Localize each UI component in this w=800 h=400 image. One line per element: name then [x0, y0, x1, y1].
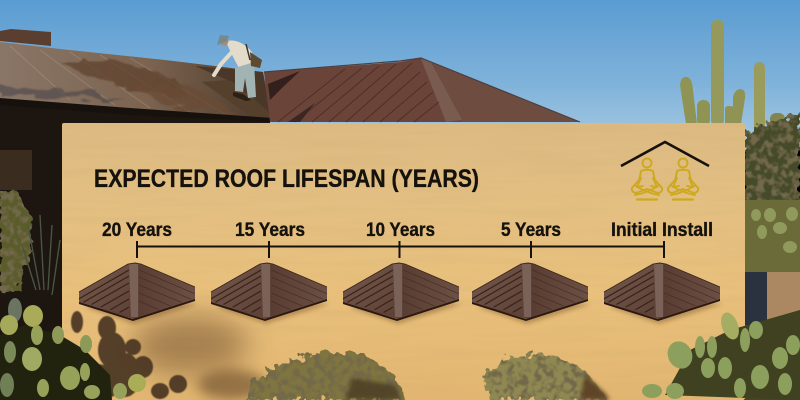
rammed earth wall panel — [62, 123, 745, 400]
roof icon: 10 years — [334, 263, 464, 324]
label: initial install: Initial Install — [611, 220, 713, 241]
weathered metal roof — [0, 42, 272, 122]
right side background shrubs — [745, 112, 800, 400]
prickly pear cactus right — [642, 310, 800, 400]
label: 20 years: 20 Years — [102, 220, 172, 241]
cactus shadow on wall — [65, 311, 187, 400]
label: 5 years: 5 Years — [501, 220, 561, 241]
left side background foliage — [0, 150, 62, 400]
roofer figure — [214, 35, 262, 101]
new brown metal roof — [264, 58, 580, 122]
roof icon: 5 years — [463, 263, 593, 324]
shrub centre right — [482, 353, 610, 400]
prickly pear cactus left — [0, 298, 146, 400]
timeline — [102, 220, 713, 258]
icon: house with two seated figures — [621, 142, 709, 200]
roof icon: 15 years — [202, 263, 332, 324]
chimney — [0, 29, 51, 46]
dark building under eaves — [0, 100, 270, 205]
roof icon: initial install — [595, 263, 725, 324]
shrub centre left — [245, 352, 405, 400]
sky background — [0, 0, 800, 150]
roof icon: 20 years — [70, 263, 200, 324]
label: 15 years: 15 Years — [235, 220, 305, 241]
title: EXPECTED ROOF LIFESPAN (YEARS) — [94, 165, 479, 193]
label: 10 years: 10 Years — [366, 220, 435, 241]
saguaro cactus behind wall — [680, 20, 785, 147]
